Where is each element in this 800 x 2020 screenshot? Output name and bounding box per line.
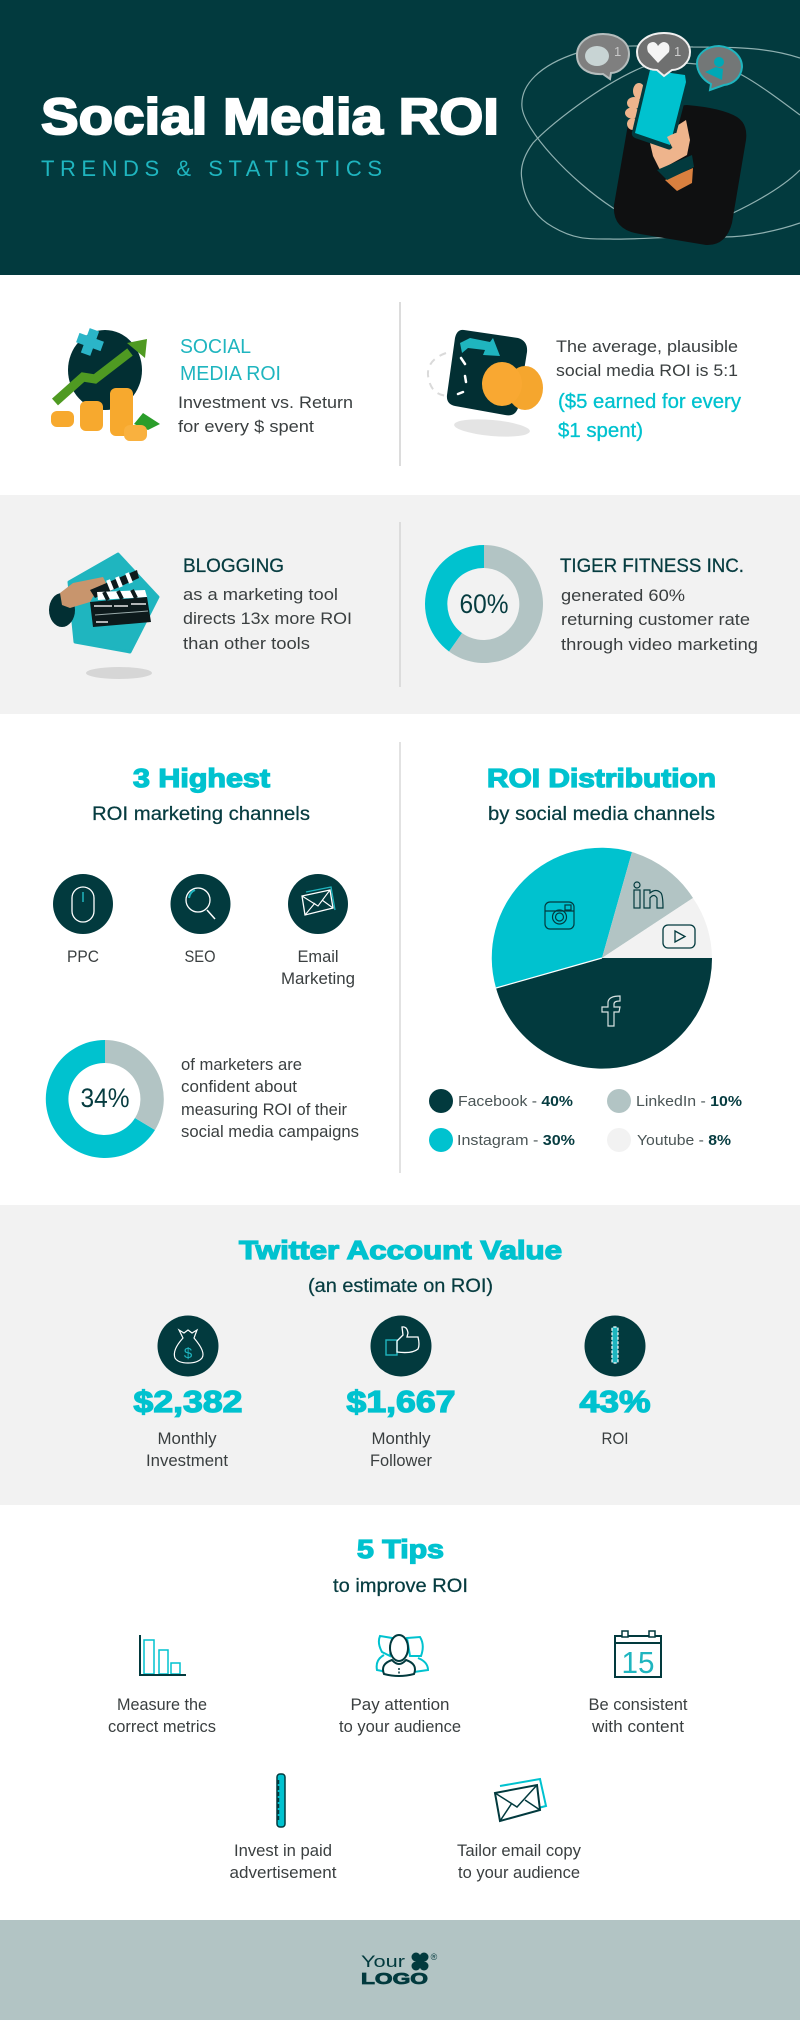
legend: Instagram - 30%: [457, 1132, 575, 1149]
legend: [429, 1089, 742, 1152]
logo: ®: [431, 1952, 438, 1962]
stat: monthly investment: Investment: [146, 1451, 228, 1470]
heading: 3 highest: 3 Highest: [133, 763, 270, 793]
legend: Youtube - 8%: [637, 1132, 731, 1149]
panel: twitter account value: [0, 1205, 800, 1505]
pie chart: ROI distribution: [492, 848, 712, 1069]
text: blogging: directs 13x more ROI: [183, 609, 352, 628]
icon: instagram: [545, 902, 574, 929]
heading: twitter account value: Twitter Account Value: [239, 1235, 562, 1265]
icon: like bubble: 1: [674, 44, 681, 59]
icon: follower bubble: [697, 46, 742, 90]
stat: monthly follower: Follower: [370, 1451, 432, 1470]
text: average ROI: $1 spent): [558, 420, 643, 442]
legend: Facebook - 40%: [458, 1093, 573, 1110]
donut chart: 60%: 60%: [460, 589, 508, 619]
icon: growth chart and coins: [51, 325, 160, 441]
text: social media ROI: MEDIA ROI: [180, 363, 281, 385]
tip: consistent content: 15: [622, 1645, 654, 1680]
icon: hand with clapperboard: [49, 554, 158, 679]
heading: twitter account value: (an estimate on ROI): [308, 1276, 493, 1297]
heading: ROI distribution: [487, 763, 716, 825]
text: tiger fitness: returning customer rate: [561, 610, 750, 629]
stat: ROI: [580, 1316, 650, 1448]
title: Social Media ROI: [41, 88, 499, 145]
tip: consistent content: [588, 1631, 688, 1736]
stat: monthly investment: Monthly: [158, 1429, 217, 1448]
tip: audience: to your audience: [339, 1717, 461, 1736]
text: average ROI: social media ROI is 5:1: [556, 361, 738, 380]
panel: marketing channels and ROI distribution: [46, 742, 742, 1173]
text: average ROI: [556, 337, 741, 442]
legend: LinkedIn - 10%: [636, 1093, 742, 1110]
tip: tailored email: Tailor email copy: [457, 1841, 581, 1860]
text: social media ROI: [178, 336, 353, 436]
icon: youtube: [663, 925, 695, 948]
logo: LOGO: [361, 1971, 428, 1988]
stat: monthly follower: Monthly: [372, 1429, 431, 1448]
heading: twitter account value: [239, 1235, 562, 1297]
icon: email: Marketing: [281, 969, 355, 988]
tip: audience: [339, 1635, 461, 1736]
logo: Your: [361, 1952, 405, 1971]
text: tiger fitness: [560, 556, 758, 654]
tip: metrics: [108, 1635, 216, 1736]
panel: footer logo: [0, 1920, 800, 2020]
stat: monthly investment: $: [184, 1345, 193, 1362]
logo: [361, 1952, 438, 1988]
stat: monthly follower: $1,667: [346, 1384, 456, 1419]
icon: comment bubble: 1: [614, 44, 621, 59]
tip: paid advertisement: [230, 1774, 337, 1882]
tip: metrics: Measure the: [117, 1695, 207, 1714]
stat: monthly investment: [134, 1316, 242, 1470]
tip: paid advertisement: Invest in paid: [234, 1841, 332, 1860]
icon: PPC mouse: [53, 874, 113, 966]
icon: like bubble: [637, 33, 690, 76]
heading: 5 tips: 5 Tips: [357, 1534, 444, 1564]
tip: tailored email: [457, 1779, 581, 1882]
text: tiger fitness: TIGER FITNESS INC.: [560, 556, 744, 577]
donut chart: 60%: [425, 545, 543, 663]
text: social media ROI: Investment vs. Return: [178, 393, 353, 412]
stat: ROI: ROI: [602, 1429, 628, 1448]
heading: 5 tips: [333, 1534, 468, 1597]
icon: SEO magnifier: [170, 874, 230, 966]
subtitle: TRENDS & STATISTICS: [41, 156, 382, 181]
tip: consistent content: Be consistent: [588, 1695, 688, 1714]
text: tiger fitness: generated 60%: [561, 586, 685, 605]
panel: header: [0, 0, 800, 275]
text: marketers confidence: measuring ROI of their: [181, 1100, 347, 1119]
text: average ROI: ($5 earned for every: [558, 391, 741, 413]
panel: blogging and tiger fitness row: [0, 495, 800, 714]
tip: consistent content: with content: [591, 1717, 684, 1736]
text: marketers confidence: of marketers are: [181, 1055, 302, 1074]
heading: 5 tips: to improve ROI: [333, 1576, 468, 1597]
icon: linkedin: [634, 882, 663, 908]
heading: 3 highest: ROI marketing channels: [92, 804, 310, 825]
text: tiger fitness: through video marketing: [561, 635, 758, 654]
text: average ROI: The average, plausible: [556, 337, 738, 356]
text: marketers confidence: confident about: [181, 1077, 297, 1096]
text: social media ROI: SOCIAL: [180, 336, 251, 358]
text: blogging: [183, 556, 352, 653]
heading: 3 highest: [92, 763, 310, 825]
icon: comment bubble: [577, 34, 629, 79]
stat: monthly investment: $2,382: [134, 1384, 242, 1419]
icon: SEO magnifier: SEO: [184, 947, 216, 966]
text: blogging: as a marketing tool: [183, 585, 338, 604]
icon: facebook: [602, 996, 620, 1026]
icon: wallet and coins: [428, 330, 543, 439]
tip: paid advertisement: advertisement: [230, 1863, 337, 1882]
panel: social media ROI row: [51, 302, 741, 466]
tip: audience: Pay attention: [350, 1695, 450, 1714]
text: blogging: BLOGGING: [183, 556, 284, 577]
heading: ROI distribution: ROI Distribution: [487, 763, 716, 793]
icon: email: [281, 874, 355, 988]
text: marketers confidence: [181, 1055, 359, 1141]
text: social media ROI: for every $ spent: [178, 417, 314, 436]
donut chart: 34%: [46, 1040, 164, 1158]
text: blogging: than other tools: [183, 634, 310, 653]
tip: tailored email: to your audience: [458, 1863, 580, 1882]
stat: monthly follower: [346, 1316, 456, 1470]
tip: metrics: correct metrics: [108, 1717, 216, 1736]
icon: email: Email: [298, 947, 338, 966]
icon: PPC mouse: PPC: [67, 947, 99, 966]
stat: ROI: 43%: [580, 1384, 650, 1419]
panel: 5 tips: [108, 1534, 688, 1882]
heading: ROI distribution: by social media channels: [488, 804, 715, 825]
illustration: hand holding phone: [521, 33, 800, 245]
text: marketers confidence: social media campaigns: [181, 1122, 359, 1141]
donut chart: 34%: 34%: [80, 1083, 130, 1113]
